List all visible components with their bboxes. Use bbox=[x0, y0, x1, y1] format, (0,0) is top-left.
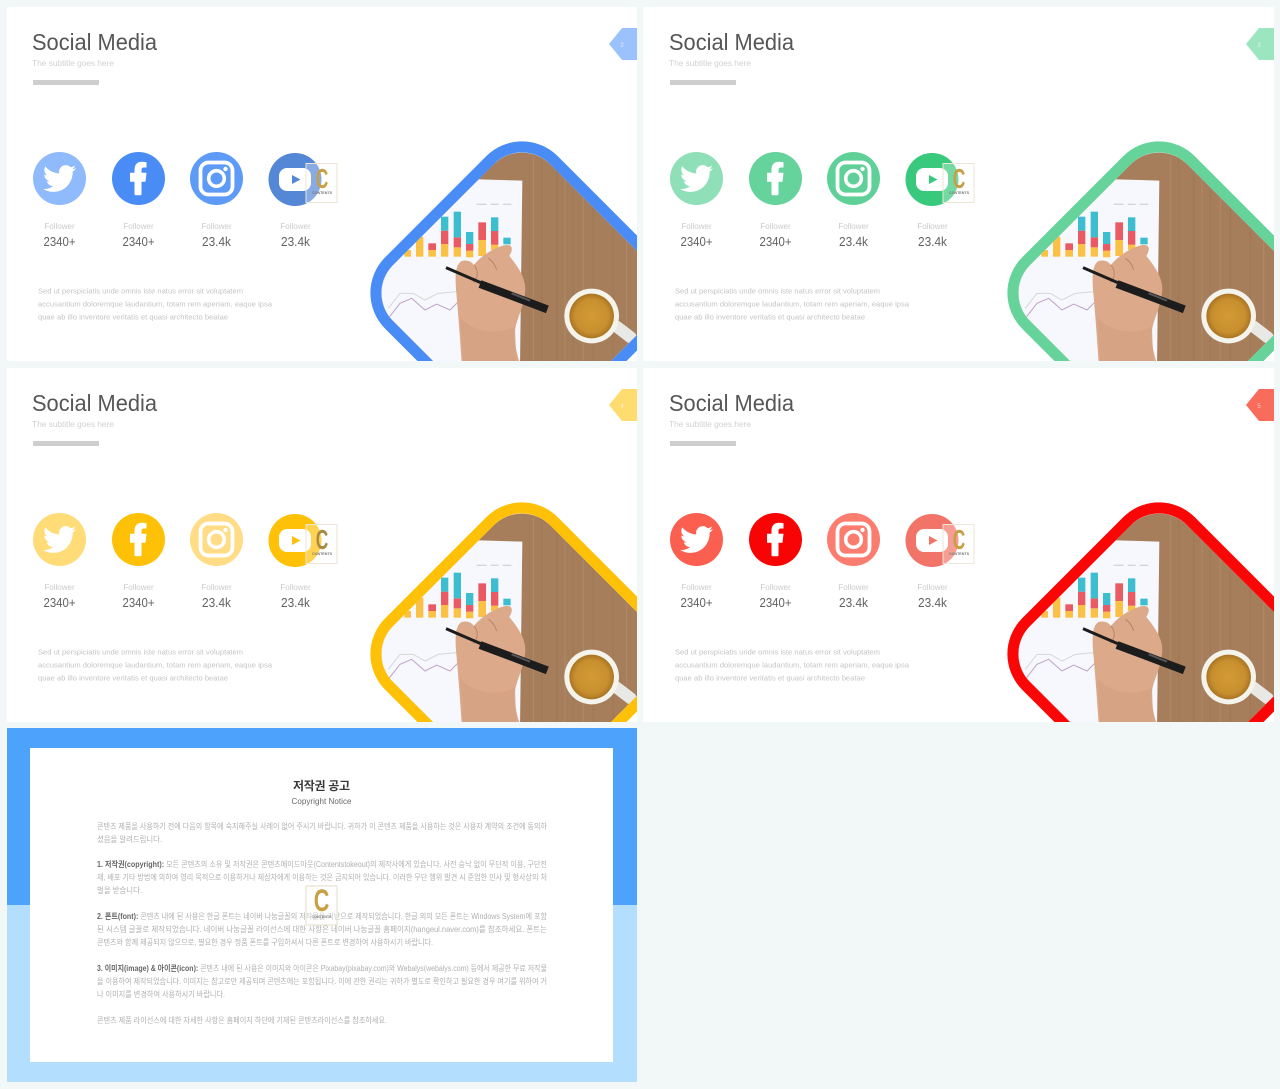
icon: twitter bbox=[670, 152, 723, 205]
icon: instagram bbox=[190, 513, 243, 566]
icon: youtube bbox=[906, 153, 958, 206]
intro paragraph bbox=[97, 821, 548, 844]
page tag bbox=[609, 28, 637, 60]
stat: youtube followers: Follower bbox=[917, 583, 948, 592]
section 1: copyright: 벌을 받습니다. bbox=[97, 885, 142, 895]
stat: twitter followers: 2340+ bbox=[680, 596, 712, 610]
stat: instagram followers bbox=[201, 222, 232, 249]
watermark: CONTENTS bbox=[312, 914, 332, 919]
stat: youtube followers: Follower bbox=[280, 222, 311, 231]
body text: quae ab illo inventore veritatis et quasi architecto beatae bbox=[675, 312, 865, 322]
body text: accusantium doloremque laudantium, totam rem aperiam, eaque ipsa bbox=[675, 300, 910, 308]
watermark bbox=[306, 163, 337, 202]
panel: yellow slide bbox=[7, 368, 637, 722]
heading: copyright: 저작권 공고 bbox=[293, 778, 350, 793]
watermark: C bbox=[316, 524, 328, 555]
body text: accusantium doloremque laudantium, totam rem aperiam, eaque ipsa bbox=[675, 660, 910, 670]
watermark: C bbox=[316, 163, 328, 194]
stat: youtube followers bbox=[917, 222, 948, 249]
body text: accusantium doloremque laudantium, totam rem aperiam, eaque ipsa bbox=[38, 660, 273, 670]
title: Social Media bbox=[32, 29, 157, 55]
stat: instagram followers: 23.4k bbox=[839, 596, 869, 610]
subtitle: The subtitle goes here bbox=[669, 419, 751, 429]
stat: youtube followers bbox=[917, 583, 948, 610]
stat: twitter followers: Follower bbox=[44, 583, 75, 592]
body text: Sed ut perspiciatis unde omnis iste natus error sit voluptatem bbox=[675, 286, 880, 296]
section 1: copyright: 재, 배포 기타 방법에 의하여 영리 목적으로 이용하거나 제삼자에게 이용하는 것은 금지되어 있습니다. 이러한 무단 행위 발견 시 준엄한 민사 및 형사상의 처 bbox=[97, 872, 547, 882]
stat: facebook followers: 2340+ bbox=[760, 596, 792, 610]
watermark bbox=[943, 524, 974, 564]
body text: Sed ut perspiciatis unde omnis iste natus error sit voluptatem bbox=[38, 648, 243, 656]
page tag: 3 bbox=[1257, 43, 1261, 49]
section 2: font bbox=[97, 911, 548, 947]
stat: instagram followers: Follower bbox=[201, 583, 232, 592]
stat: instagram followers bbox=[838, 222, 869, 249]
body text: accusantium doloremque laudantium, totam rem aperiam, eaque ipsa bbox=[38, 300, 273, 308]
icon: twitter bbox=[33, 152, 86, 205]
stat: instagram followers: 23.4k bbox=[202, 235, 232, 249]
photo: hand charting in diamond frame bbox=[1007, 502, 1274, 722]
page tag: 2 bbox=[620, 43, 624, 49]
icon: youtube bbox=[906, 514, 958, 567]
stat: facebook followers: 2340+ bbox=[760, 235, 792, 249]
icon: facebook bbox=[112, 152, 165, 205]
body text: quae ab illo inventore veritatis et quasi architecto beatae bbox=[675, 674, 865, 682]
stat: twitter followers: Follower bbox=[681, 222, 712, 231]
section 3: image and icon: 3. 이미지(image) & 아이콘(icon): 콘텐츠 내에 된 사용은 이미지와 아이콘은 Pixabay(pixabay.com)와 Webalys(webalys.com) 등에서 제공한 무료 저작물 bbox=[97, 963, 547, 973]
icon: facebook bbox=[749, 513, 802, 566]
body text bbox=[38, 648, 273, 682]
heading underline bbox=[33, 441, 99, 446]
photo: hand charting in diamond frame bbox=[370, 502, 637, 722]
body text: quae ab illo inventore veritatis et quasi architecto beatae bbox=[38, 312, 228, 322]
subtitle: The subtitle goes here bbox=[32, 58, 114, 68]
intro paragraph: 셨음을 알려드립니다. bbox=[97, 834, 162, 844]
stat: facebook followers bbox=[760, 222, 792, 249]
section 2: font: 된 시스템 글꼴로 제작되었습니다. 네이버 나눔글꼴 라이선스에 대한 사항은 네이버 나눔글꼴 홈페이지(hangeul.naver.com)를 참조하세요. 폰트는 bbox=[97, 924, 547, 934]
page tag: 4 bbox=[620, 404, 624, 410]
subheading: copyright notice: Copyright Notice bbox=[292, 797, 352, 806]
panel: green slide bbox=[643, 7, 1274, 361]
icon: instagram bbox=[827, 152, 880, 205]
title: Social Media bbox=[32, 390, 157, 416]
stat: instagram followers: 23.4k bbox=[202, 596, 232, 610]
watermark: C bbox=[953, 524, 965, 555]
stat: facebook followers: Follower bbox=[760, 583, 791, 592]
body text: quae ab illo inventore veritatis et quasi architecto beatae bbox=[38, 674, 228, 682]
watermark: CONTENTS bbox=[949, 190, 969, 195]
stat: youtube followers bbox=[280, 222, 311, 249]
panel: blue slide bbox=[7, 7, 637, 361]
page tag bbox=[609, 389, 637, 421]
intro paragraph: 콘텐츠 제품을 사용하기 전에 다음의 항목에 숙지해주실 사례이 없어 주시기 바랍니다. 귀하가 이 콘텐츠 제품을 사용하는 것은 사용자 계약의 조건에 동의하 bbox=[97, 821, 548, 831]
photo: hand charting in diamond frame bbox=[1007, 141, 1274, 361]
stat: facebook followers: Follower bbox=[123, 583, 154, 592]
icon: instagram bbox=[827, 513, 880, 566]
body text: Sed ut perspiciatis unde omnis iste natus error sit voluptatem bbox=[675, 648, 880, 656]
stat: youtube followers: Follower bbox=[917, 222, 948, 231]
stat: twitter followers bbox=[680, 222, 712, 249]
watermark: CONTENTS bbox=[312, 190, 332, 195]
body text bbox=[675, 286, 910, 322]
stat: instagram followers: 23.4k bbox=[839, 235, 869, 249]
watermark: CONTENTS bbox=[312, 551, 332, 556]
watermark: C bbox=[953, 163, 965, 194]
stat: twitter followers: 2340+ bbox=[44, 235, 76, 249]
stat: instagram followers bbox=[201, 583, 232, 610]
section 3: image and icon: 나 이미지를 변경하여 사용하시기 바랍니다. bbox=[97, 989, 225, 999]
stat: twitter followers: Follower bbox=[681, 583, 712, 592]
stat: youtube followers: 23.4k bbox=[281, 235, 311, 249]
stat: instagram followers: Follower bbox=[838, 222, 869, 231]
subtitle: The subtitle goes here bbox=[32, 419, 114, 429]
stat: twitter followers bbox=[44, 583, 76, 610]
stat: twitter followers bbox=[680, 583, 712, 610]
watermark bbox=[306, 524, 337, 564]
stat: instagram followers bbox=[838, 583, 869, 610]
stat: twitter followers: 2340+ bbox=[44, 596, 76, 610]
title: Social Media bbox=[669, 390, 794, 416]
watermark bbox=[943, 163, 974, 202]
icon: youtube bbox=[268, 514, 322, 567]
stat: instagram followers: Follower bbox=[838, 583, 869, 592]
section 2: font: 콘텐츠와 함께 제공되지 않으므로, 필요한 경우 정품 폰트를 구입하셔서 다른 폰트로 변경하여 사용하시기 바랍니다. bbox=[97, 937, 433, 947]
panel: copyright notice bbox=[7, 728, 637, 1082]
section 1: copyright bbox=[97, 859, 547, 895]
photo: hand charting in diamond frame bbox=[370, 141, 637, 361]
stat: facebook followers: Follower bbox=[123, 222, 154, 231]
stat: twitter followers bbox=[44, 222, 76, 249]
heading underline bbox=[670, 441, 736, 446]
heading underline bbox=[670, 80, 736, 85]
section 1: copyright: 1. 저작권(copyright): 모든 콘텐츠의 소유 및 저작권은 콘텐츠메이드아웃(Contentstokeout)의 제작사에게 있습니다. 사전 승낙 없이 무단적 이용, 구단전 bbox=[97, 859, 547, 869]
stat: youtube followers: 23.4k bbox=[918, 235, 948, 249]
stat: twitter followers: Follower bbox=[44, 222, 75, 231]
stat: facebook followers: 2340+ bbox=[122, 596, 154, 610]
stat: instagram followers: Follower bbox=[201, 222, 232, 231]
title: Social Media bbox=[669, 29, 794, 55]
closing note: 콘텐츠 제품 라이선스에 대한 자세한 사항은 홈페이지 하단에 기재된 콘텐츠라이선스를 참조하세요. bbox=[97, 1015, 387, 1025]
stat: facebook followers bbox=[760, 583, 792, 610]
subtitle: The subtitle goes here bbox=[669, 58, 751, 68]
icon: facebook bbox=[112, 513, 165, 566]
icon: instagram bbox=[190, 152, 243, 205]
panel: red slide bbox=[643, 368, 1274, 722]
watermark: C bbox=[314, 883, 329, 918]
stat: facebook followers bbox=[122, 583, 154, 610]
stat: facebook followers bbox=[122, 222, 154, 249]
section 2: font: 2. 폰트(font): 콘텐츠 내에 된 사용은 한글 폰트는 네이버 나눔글꼴의 저작물을 기반으로 제작되었습니다. 한글 외의 모든 폰트는 Windows System에 포함 bbox=[97, 911, 548, 921]
stat: twitter followers: 2340+ bbox=[680, 235, 712, 249]
page tag: 5 bbox=[1257, 404, 1261, 410]
watermark: CONTENTS bbox=[949, 551, 969, 556]
icon: twitter bbox=[670, 513, 723, 566]
section 3: image and icon: 을 이용하여 제작되었습니다. 이미지는 참고로만 제공되며 콘텐츠에는 포함됩니다. 이에 관한 권리는 귀하가 별도로 확인하고 필요한 경우 여기를 위하여 거 bbox=[97, 976, 547, 986]
page tag bbox=[1246, 28, 1274, 60]
icon: facebook bbox=[749, 152, 802, 205]
icon: twitter bbox=[33, 513, 86, 566]
stat: youtube followers: 23.4k bbox=[281, 596, 311, 610]
body text bbox=[38, 286, 273, 322]
section 3: image and icon bbox=[97, 963, 547, 999]
stat: youtube followers bbox=[280, 583, 311, 610]
icon: youtube bbox=[268, 153, 322, 206]
stat: facebook followers: Follower bbox=[760, 222, 791, 231]
watermark bbox=[306, 883, 337, 925]
body text bbox=[675, 648, 910, 682]
stat: youtube followers: 23.4k bbox=[918, 596, 948, 610]
body text: Sed ut perspiciatis unde omnis iste natus error sit voluptatem bbox=[38, 286, 243, 296]
page tag bbox=[1246, 389, 1274, 421]
stat: youtube followers: Follower bbox=[280, 583, 311, 592]
stat: facebook followers: 2340+ bbox=[122, 235, 154, 249]
heading underline bbox=[33, 80, 99, 85]
